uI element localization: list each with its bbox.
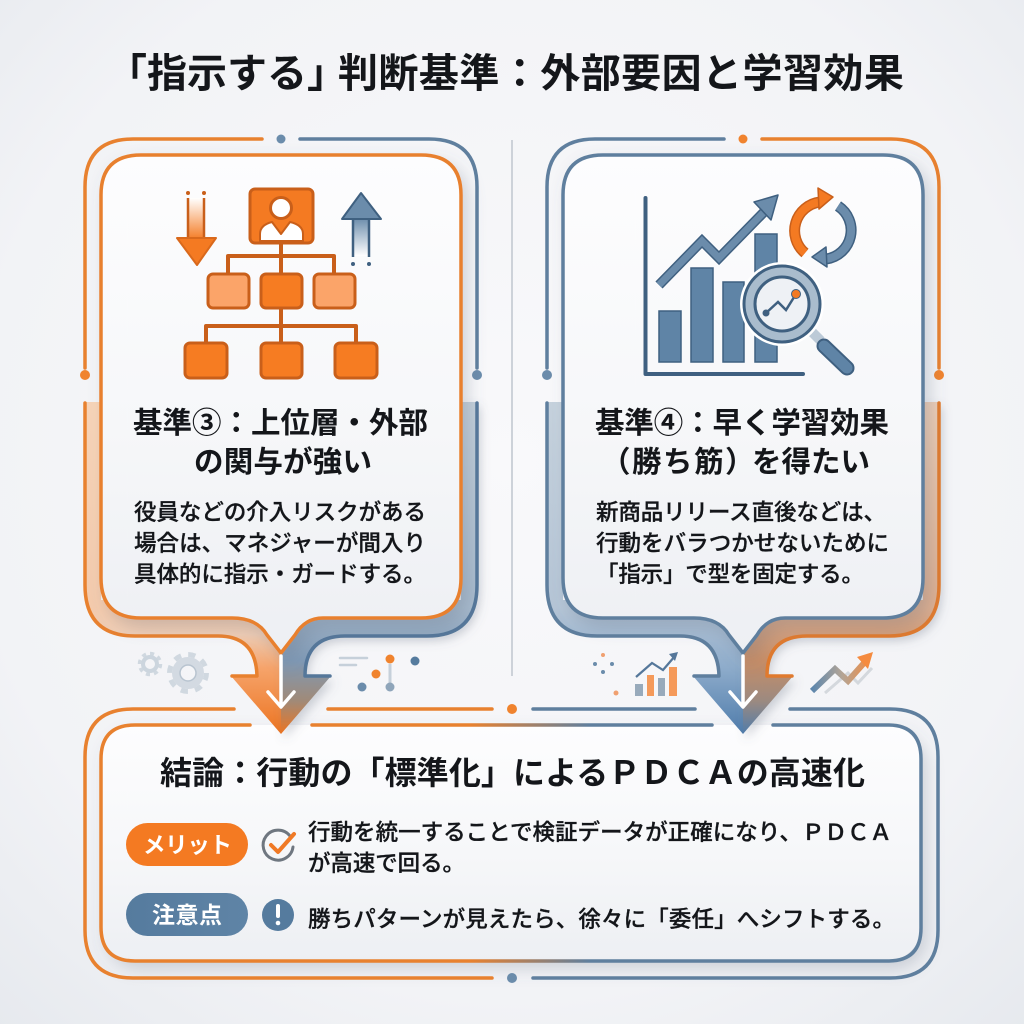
icon: data dots	[340, 654, 420, 692]
icon: magnifier	[740, 262, 847, 368]
badge: merit: メリット	[143, 833, 232, 858]
merit text	[308, 819, 892, 876]
criterion 3 heading	[133, 407, 428, 479]
criterion 4 body: 行動をバラつかせないために	[596, 531, 889, 556]
title: 判断基準：外部要因と学習効果	[338, 52, 904, 96]
icon: org chart	[185, 189, 377, 378]
frame lines	[85, 139, 477, 676]
icon: gears	[140, 654, 206, 692]
criterion 4 heading: （勝ち筋）	[601, 446, 756, 479]
panel: criterion 3	[80, 134, 482, 734]
criterion 3 body: 場合は、マネジャーが間入り	[134, 531, 426, 556]
badge: merit	[126, 823, 248, 866]
arrow pointer	[268, 656, 294, 707]
panel: criterion 4	[542, 134, 944, 734]
criterion 3 body: 役員などの介入リスクがある	[134, 500, 426, 525]
icon: exclamation	[262, 899, 294, 931]
icon: down arrow	[177, 191, 216, 265]
band and arrow right half	[281, 402, 477, 734]
criterion 3 body: 具体的に指示・ガードする。	[134, 562, 426, 587]
badge: caution: 注意点	[152, 902, 222, 928]
criterion 4 heading: を得たい	[752, 446, 870, 479]
arrow pointer	[730, 656, 756, 707]
caution text: 勝ちパターンが見えたら、徐々に「委任」へシフトする。	[308, 907, 895, 932]
frame lines	[547, 139, 939, 676]
criterion 4 body: 「指示」で型を固定する。	[596, 562, 864, 587]
icon: up arrow	[342, 193, 381, 266]
merit text: 行動を統一することで検証データが正確になり、ＰＤＣＡ	[308, 819, 892, 845]
band and arrow left half	[85, 402, 281, 734]
criterion 4 body	[596, 500, 889, 587]
icon: cycle arrows	[795, 188, 851, 267]
panel: conclusion	[85, 704, 938, 983]
card	[101, 155, 461, 653]
criterion 3 body	[134, 500, 426, 587]
band and arrow left half	[547, 402, 743, 734]
title: 「指示する」	[107, 52, 347, 96]
criterion 3 heading: の関与が強い	[194, 445, 372, 479]
merit text: が高速で回る。	[308, 851, 465, 876]
criterion 4 heading: 基準④：早く学習効果	[595, 407, 889, 440]
icon: trend arrow	[812, 652, 873, 693]
icon: mini bar chart	[635, 652, 678, 696]
icon: check	[263, 830, 294, 860]
badge: caution	[126, 893, 248, 936]
criterion 3 heading: 基準③：上位層・外部	[133, 407, 428, 440]
icon: sparkle dots	[593, 653, 618, 696]
center divider	[511, 140, 513, 676]
band and arrow right half	[743, 402, 939, 734]
conclusion heading: 結論：行動の「標準化」によるＰＤＣＡの高速化	[160, 755, 865, 791]
card	[563, 155, 923, 653]
criterion 4 body: 新商品リリース直後などは、	[596, 500, 886, 525]
icon: growth chart	[646, 195, 803, 374]
criterion 4 heading	[595, 407, 889, 479]
